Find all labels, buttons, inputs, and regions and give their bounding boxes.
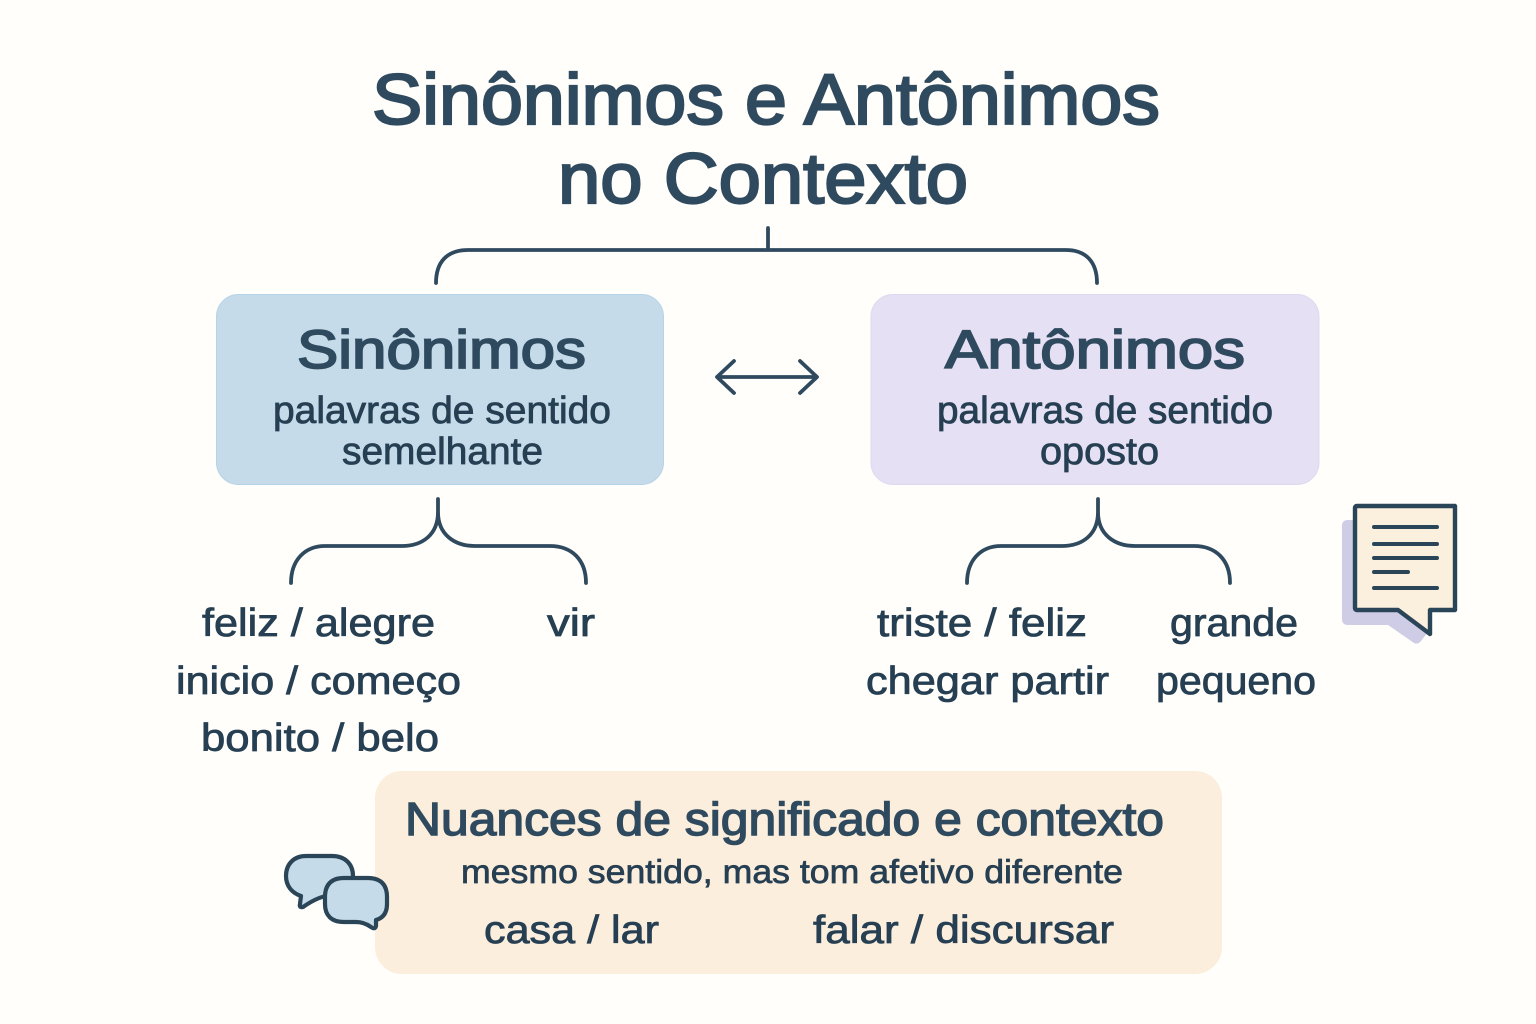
brace: sinônimos xyxy=(291,499,586,583)
text: definição de antônimos: palavras de sentido xyxy=(937,390,1273,432)
heading: sinônimos: Sinônimos xyxy=(297,320,586,380)
top bracket connector xyxy=(436,228,1097,283)
panel: antônimos xyxy=(871,294,1319,484)
list: exemplos de sinônimos xyxy=(176,602,595,760)
list: exemplos de antônimos: grande xyxy=(1170,602,1298,645)
list: exemplos de sinônimos: vir xyxy=(547,602,595,645)
list: exemplos de sinônimos: feliz / alegre xyxy=(202,602,435,645)
title: no Contexto xyxy=(558,140,968,219)
text: definição de antônimos xyxy=(937,390,1273,473)
icon: double arrow xyxy=(717,361,817,393)
text: definição de sinônimos xyxy=(273,390,611,473)
list: exemplos de antônimos: chegar partir xyxy=(866,660,1109,703)
list: exemplos de sinônimos: inicio / começo xyxy=(176,660,461,703)
text: definição de sinônimos: semelhante xyxy=(342,431,543,473)
list: exemplos de antônimos: triste / feliz xyxy=(877,602,1087,645)
text: descrição de nuances: mesmo sentido, mas tom afetivo diferente xyxy=(461,853,1123,890)
heading: antônimos: Antônimos xyxy=(945,320,1245,380)
title xyxy=(372,61,1160,219)
icon: document speech bubble xyxy=(1342,506,1455,644)
heading: nuances: Nuances de significado e contexto xyxy=(405,793,1164,845)
text: definição de sinônimos: palavras de sentido xyxy=(273,390,611,432)
text: exemplo falar discursar: falar / discursar xyxy=(813,909,1114,952)
list: exemplos de antônimos xyxy=(866,602,1316,703)
panel: nuances xyxy=(375,771,1222,974)
panel: sinônimos xyxy=(216,294,664,484)
list: exemplos de sinônimos: bonito / belo xyxy=(201,717,439,760)
title: Sinônimos e Antônimos xyxy=(372,61,1160,140)
icon: chat bubbles xyxy=(286,856,387,928)
list: exemplos de antônimos: pequeno xyxy=(1156,660,1316,703)
text: definição de antônimos: oposto xyxy=(1040,431,1159,473)
text: exemplo casa lar: casa / lar xyxy=(484,909,659,952)
brace: antônimos xyxy=(967,499,1230,583)
